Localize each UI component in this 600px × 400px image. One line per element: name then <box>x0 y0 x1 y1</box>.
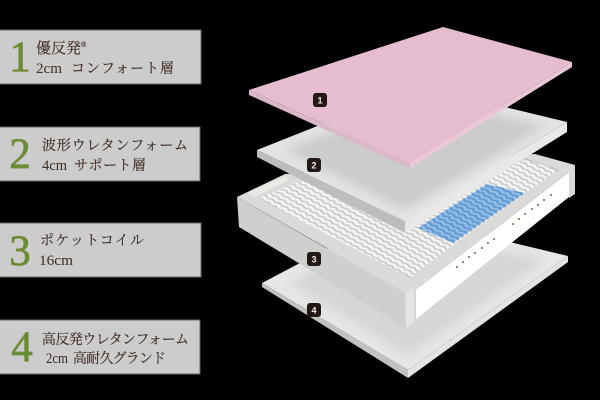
number 4: 4 <box>11 324 33 371</box>
badge 2 <box>307 158 321 172</box>
badge 4 <box>307 303 321 317</box>
text: layer 1 name: 2cm <box>36 61 62 77</box>
number 3: 3 <box>9 228 31 275</box>
panel: layer 1 label <box>0 30 201 84</box>
text: layer 2 name: 波形ウレタンフォーム <box>42 138 188 154</box>
text: layer 3 name: 16cm <box>39 253 73 269</box>
text: layer 2 name: 4cm <box>42 158 67 174</box>
number 1: 1 <box>9 34 31 81</box>
number 2: 2 <box>9 131 31 178</box>
badge 4: 4 <box>311 306 317 316</box>
coil field <box>258 160 558 278</box>
layer 2: wave urethane support <box>257 106 567 233</box>
text: layer 1 name <box>36 40 174 77</box>
panel: layer 4 label <box>0 320 200 374</box>
badge 1: 1 <box>317 96 323 106</box>
right corner post <box>569 165 575 198</box>
text: layer 4 name: 高耐久グランド <box>73 351 166 367</box>
white right face <box>416 172 569 319</box>
text: layer 3 name <box>39 233 144 269</box>
text: layer 1 name: ® <box>81 41 87 49</box>
front corner post <box>405 288 414 328</box>
badge 3 <box>307 252 321 266</box>
layer 3: pocket coil core <box>237 154 575 328</box>
text: layer 1 name: コンフォート層 <box>71 61 174 77</box>
panel: layer 2 label <box>0 127 200 181</box>
layer 4: base urethane sheet <box>262 236 568 378</box>
frame inner strips <box>247 176 290 197</box>
badge 3: 3 <box>311 254 317 264</box>
left front face <box>237 197 406 328</box>
text: layer 4 name: 2cm <box>46 351 68 367</box>
layer 1: pink comfort sheet <box>249 27 572 168</box>
top frame <box>237 154 575 293</box>
text: layer 4 name: 高反発ウレタンフォーム <box>42 332 189 348</box>
badge 2: 2 <box>311 160 317 170</box>
badge 1 <box>313 93 327 107</box>
text: layer 1 name: 優反発 <box>36 41 81 57</box>
text: layer 4 name <box>42 332 189 367</box>
text: layer 2 name: サポート層 <box>74 158 146 174</box>
text: layer 2 name <box>42 138 188 174</box>
panel: layer 3 label <box>0 223 201 277</box>
vent holes <box>456 194 552 268</box>
text: layer 3 name: ポケットコイル <box>40 233 144 249</box>
blue coil zone <box>418 184 525 243</box>
